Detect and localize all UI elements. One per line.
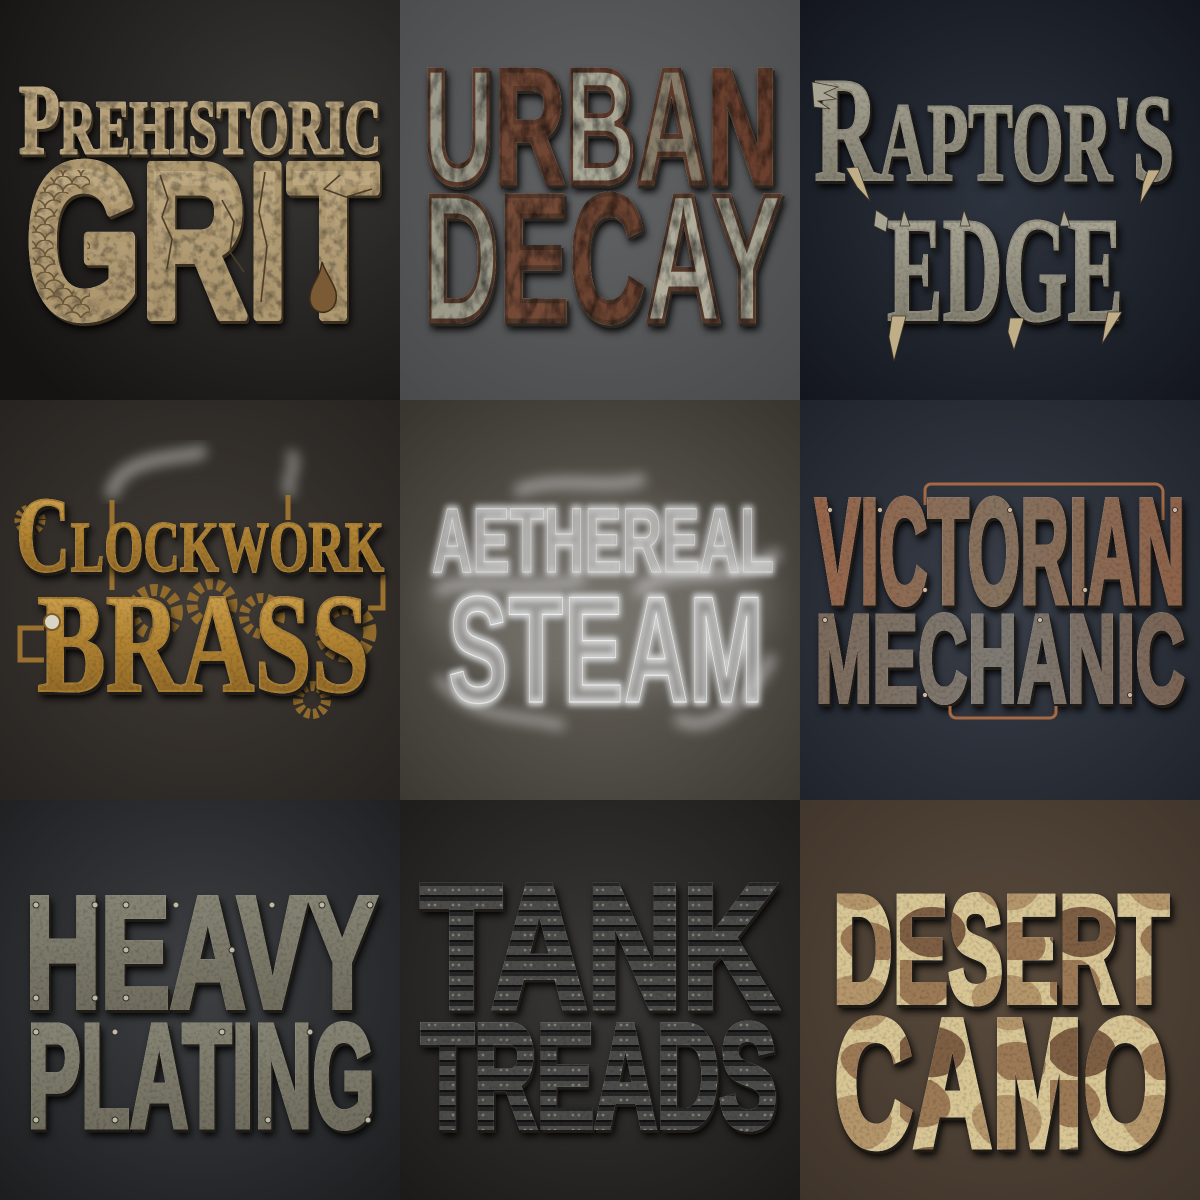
heading: Brass: BRASS [37,564,369,722]
heading: Steam glow: STEAM [448,565,764,735]
panel: Desert Camo [800,800,1200,1200]
panel: Victorian Mechanic [800,400,1200,800]
icon: fossil drip on T [310,262,336,312]
panel: Prehistoric Grit [0,0,400,400]
heading: Decay: DECAY [423,156,782,360]
heading: Tank: TANK [421,849,777,1045]
panel: Heavy Plating [0,800,400,1200]
icon: raptor claws and spikes [812,82,1160,361]
panel: Aethereal Steam [400,400,800,800]
icon: copper pipe top [925,484,1163,520]
icon: rivets [822,508,1178,698]
icon: steam haze [425,505,775,695]
heading: Steam: STEAM [448,565,764,735]
heading: Prehistoric: PREHISTORIC [19,64,381,175]
icon: dinosaur scales on G [28,170,90,320]
panel: Raptor's Edge [800,0,1200,400]
icon: rivets [33,902,373,1123]
icon: steam wisps [440,480,775,725]
heading: Treads: TREADS [421,994,777,1159]
panel: Urban Decay [400,0,800,400]
icon: copper pipe bottom [950,706,1056,718]
panel: Clockwork Brass [0,400,400,800]
heading: Clockwork: CLOCKWORK [16,476,384,595]
icon: rising steam [112,452,294,492]
heading: Heavy: HEAVY [25,865,377,1041]
icon: gears [18,508,370,714]
panel: Tank Treads [400,800,800,1200]
heading: Aethereal: AETHEREAL [432,490,774,592]
heading: Aethereal glow: AETHEREAL [432,490,774,592]
heading: Plating: PLATING [27,994,375,1159]
icon: brass pipes [20,495,383,660]
icon: pressure gauge [44,614,60,630]
icon: cracks in stone [160,172,372,302]
heading: Grit: GRIT [26,120,378,363]
heading: Urban: URBAN [423,35,778,218]
